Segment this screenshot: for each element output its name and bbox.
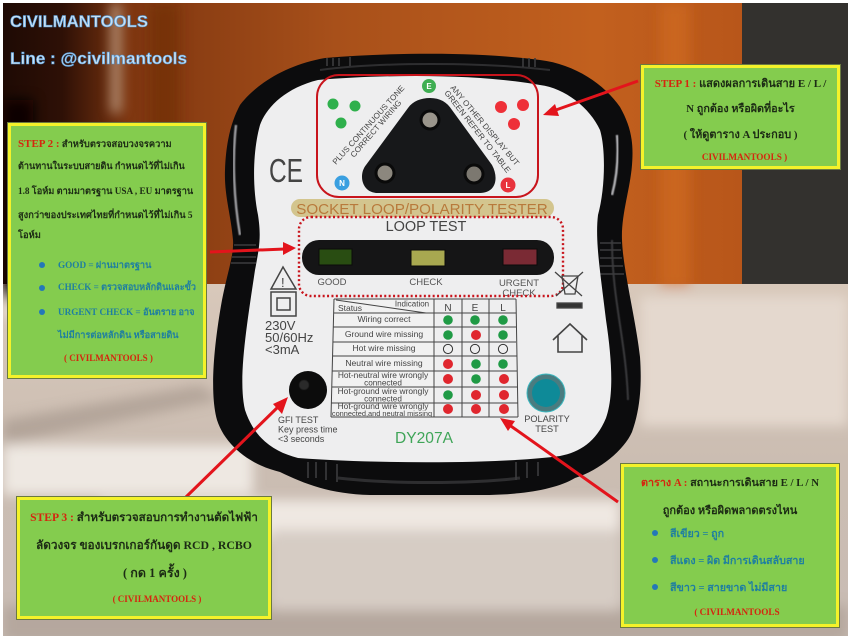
step 1 text: STEP 1 : แสดงผลการเดินสาย E / L / <box>655 78 826 90</box>
indicator E N L: L <box>506 181 511 190</box>
indicator E N L: E <box>426 82 432 91</box>
step 3 text: STEP 3 : สำหรับตรวจสอบการทำงานตัดไฟฟ้า <box>30 511 258 524</box>
panel: step 1: ( ให้ดูตาราง A ประกอบ ) <box>683 129 798 141</box>
socket labels: GREEN REFER TO TABLE <box>442 89 512 175</box>
loop test panel: LOOP TEST <box>386 219 467 235</box>
table A text: ตาราง A : สถานะการเดินสาย E / L / N <box>641 477 819 489</box>
indicator E N L <box>334 79 516 192</box>
socket labels: PLUS CONTINUOUS TONE <box>331 84 406 166</box>
panel: step 2: 1.8 โอห์ม ตามมาตรฐาน USA , EU มาตรฐาน <box>18 186 193 196</box>
panel: step 2: ต้านทานในระบบสายดิน กำหนดไว้ที่ไม่เกิน <box>18 161 185 171</box>
status table: Hot-neutral wire wrongly <box>338 370 429 380</box>
panel: step 2: โอห์ม <box>18 231 41 241</box>
status table: connected <box>364 394 402 404</box>
loop test panel <box>302 219 554 299</box>
status table: connected,and neutral missing <box>332 409 432 418</box>
status table: L <box>500 303 506 314</box>
panel: table A: สีขาว = สายขาด ไม่มีสาย <box>670 582 787 594</box>
brand heading: CIVILMANTOOLS <box>10 13 148 31</box>
panel: table A: ถูกต้อง หรือผิดพลาดตรงไหน <box>663 505 797 517</box>
warning symbols and rating: 230V <box>265 318 296 333</box>
status table: Status <box>338 303 362 313</box>
socket labels: ANY OTHER DISPLAY BUT <box>448 84 521 168</box>
panel: table A <box>621 464 839 627</box>
brand heading: Line : @civilmantools <box>10 50 187 68</box>
panel: step 1 <box>641 65 840 169</box>
device face <box>242 76 611 462</box>
polarity test button <box>524 374 570 434</box>
loop test panel: CHECK <box>409 277 443 288</box>
panel: table A: สีเขียว = ถูก <box>670 528 724 540</box>
panel: step 3: ( กด 1 ครั้ง ) <box>123 566 187 580</box>
GFI test button <box>278 371 338 444</box>
status table <box>331 299 518 418</box>
status table: E <box>472 303 479 314</box>
loop test panel: CHECK <box>502 288 536 299</box>
socket labels: CORRECT WIRING <box>349 98 403 159</box>
warning symbols and rating: <3mA <box>265 342 300 357</box>
status table: Hot wire missing <box>352 343 416 353</box>
socket triangle <box>362 98 496 193</box>
panel: step 2: GOOD = ผ่านมาตรฐาน <box>58 260 151 270</box>
panel: step 3: ลัดวงจร ของเบรกเกอร์กันดูด RCD , RCBO <box>36 538 252 552</box>
product title: SOCKET LOOP/POLARITY TESTER <box>296 201 548 218</box>
status table: Ground wire missing <box>345 329 423 339</box>
marble table <box>3 284 848 636</box>
model number: DY207A <box>395 430 454 447</box>
panel: step 1: CIVILMANTOOLS ) <box>702 152 787 162</box>
GFI test button: <3 seconds <box>278 434 325 444</box>
panel: table A: สีแดง = ผิด มีการเดินสลับสาย <box>670 555 805 567</box>
panel: step 2: ไม่มีการต่อหลักดิน หรือสายดิน <box>58 330 179 340</box>
loop test panel: GOOD <box>317 277 347 288</box>
indicator E N L: N <box>339 179 345 188</box>
status table: Hot-ground wire wrongly <box>338 386 429 396</box>
panel: step 2: สูงกว่าของประเทศไทยที่กำหนดไว้ที่ไม่เกิน 5 <box>18 211 193 221</box>
brand heading <box>10 13 187 68</box>
green and red dots <box>328 98 529 130</box>
GFI test button: GFI TEST <box>278 415 319 425</box>
recycle bin and house icons <box>553 272 587 352</box>
step 2 text: STEP 2 : สำหรับตรวจสอบวงจรความ <box>18 138 172 150</box>
status table: Wiring correct <box>357 314 411 324</box>
status table: N <box>444 303 452 314</box>
GFI test button: Key press time <box>278 424 338 434</box>
body ribs <box>231 57 624 482</box>
red frame around socket <box>317 75 538 197</box>
panel: step 3: ( CIVILMANTOOLS ) <box>113 594 201 604</box>
panel: step 2: URGENT CHECK = อันตราย อาจ <box>58 307 195 317</box>
warning symbols and rating <box>265 267 313 357</box>
panel: step 1: N ถูกต้อง หรือผิดที่อะไร <box>686 103 795 115</box>
socket labels <box>331 84 521 175</box>
polarity test button: TEST <box>535 424 559 434</box>
arrows <box>186 81 638 502</box>
step 2 legend <box>39 262 45 268</box>
device body <box>213 54 641 495</box>
panel: step 2: ( CIVILMANTOOLS ) <box>64 353 153 363</box>
wood wall <box>3 3 743 288</box>
dotted red frame around loop test <box>299 217 563 296</box>
status table: Neutral wire missing <box>345 358 423 368</box>
status table: Hot-ground wire wrongly <box>338 401 429 411</box>
panel: table A: ( CIVILMANTOOLS <box>694 607 780 617</box>
dark wall <box>742 3 848 288</box>
polarity test button: POLARITY <box>524 414 570 424</box>
loop test panel: URGENT <box>499 278 539 289</box>
warning symbols and rating: 50/60Hz <box>265 330 313 345</box>
table A legend <box>652 530 658 536</box>
panel: step 2: CHECK = ตรวจสอบหลักดินและขั้ว <box>58 282 196 292</box>
status table: Indication <box>395 300 429 308</box>
panel: step 3 <box>17 497 271 619</box>
panel: step 2 <box>8 123 206 378</box>
CE mark: CE <box>269 152 303 189</box>
warning symbols and rating: ! <box>281 275 285 290</box>
status table: connected <box>364 378 402 388</box>
